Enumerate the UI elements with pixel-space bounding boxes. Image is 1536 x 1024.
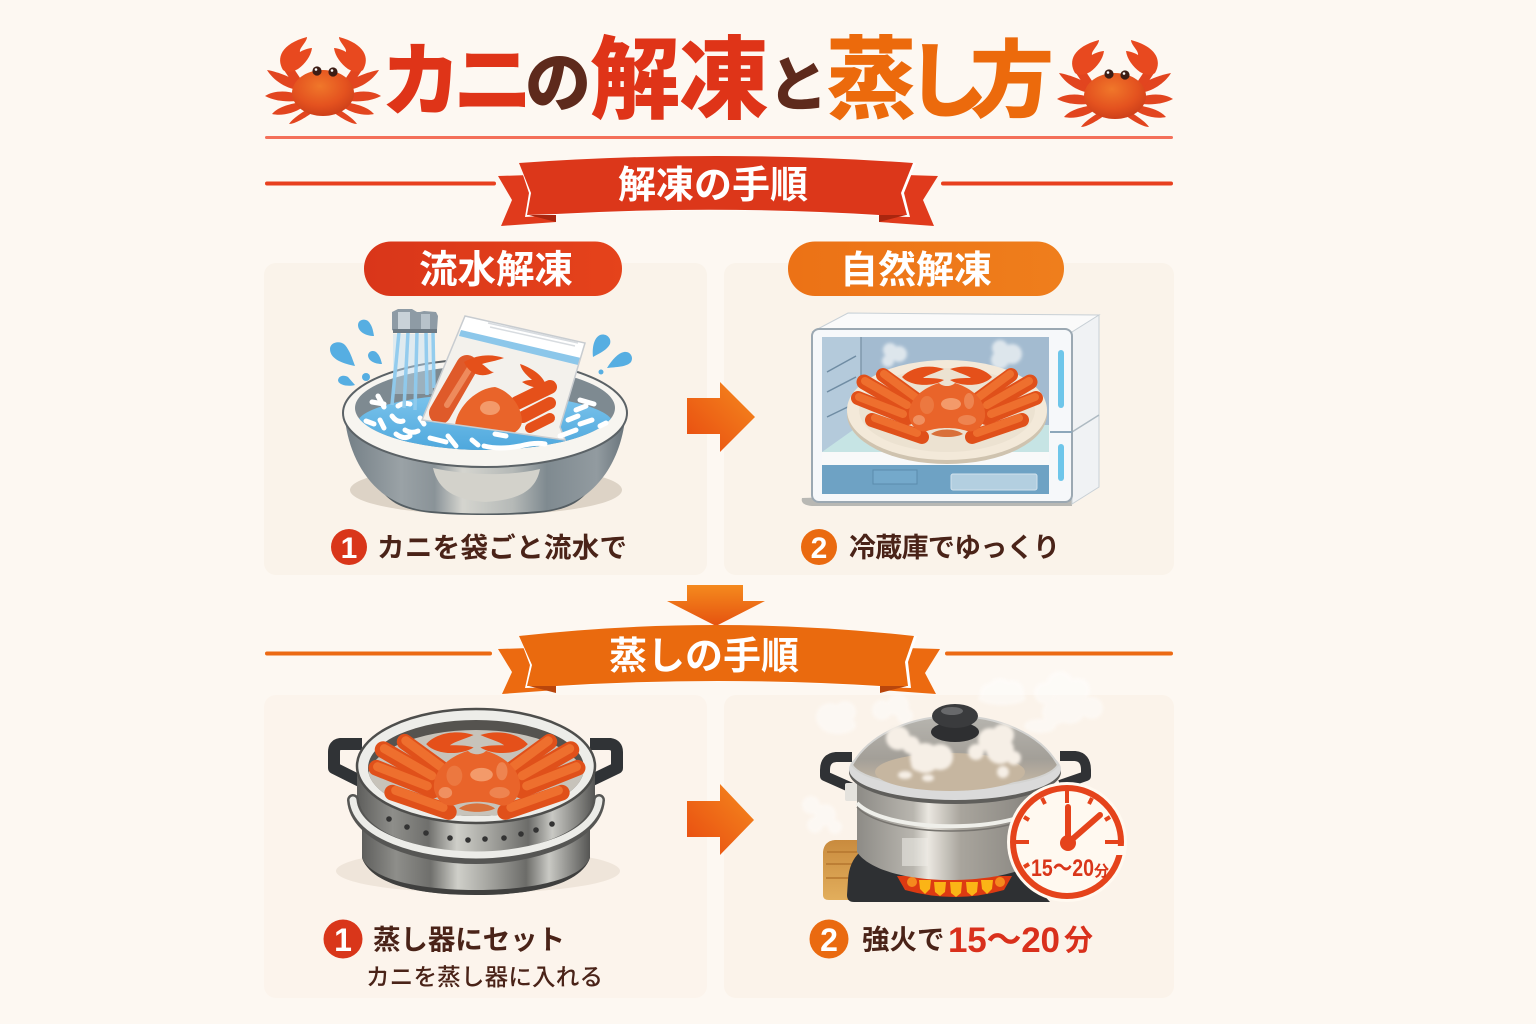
illustration: crab bag in bowl under tap	[330, 309, 632, 515]
step label: steam 2: 15〜20	[948, 921, 1060, 960]
step label: steam 2	[810, 920, 1093, 960]
icon: crab left	[265, 37, 381, 124]
title: 方	[970, 34, 1054, 128]
section banner: steaming: 蒸しの手順	[609, 636, 799, 678]
step label: thaw 2: 2	[811, 532, 827, 565]
icon: glass lid	[849, 704, 1061, 804]
icon: stove	[847, 852, 1050, 902]
section banner: thawing: 解凍の手順	[618, 165, 808, 207]
subheading pill: natural thaw	[788, 242, 1064, 296]
icon: crab right	[1057, 40, 1173, 127]
section banner: steaming	[265, 625, 1173, 694]
step label: thaw 1: カニを袋ごと流水で	[377, 532, 627, 563]
step label: steam 1	[324, 920, 603, 990]
title	[381, 31, 1054, 131]
arrow: steam step one to two	[687, 784, 754, 855]
title: ニ	[453, 37, 533, 126]
icon: steamer handles	[334, 744, 617, 781]
title: と	[768, 52, 828, 119]
subheading pill: flowing water: 流水解凍	[419, 249, 573, 292]
step label: thaw 2: 冷蔵庫でゆっくり	[849, 533, 1060, 563]
icon: steam clouds	[802, 671, 1103, 834]
icon: clock 15-20 minutes: 15〜20	[1031, 855, 1094, 882]
title rule	[265, 136, 1173, 139]
panel: flowing water thaw	[264, 263, 707, 575]
icon: clock 15-20 minutes	[1007, 782, 1127, 902]
title: 蒸	[826, 31, 916, 131]
step label: thaw 2	[801, 529, 1060, 565]
icon: flame	[897, 876, 1012, 897]
icon: crab in plastic bag	[422, 316, 585, 440]
step label: thaw 1: 1	[341, 532, 357, 565]
panel: set steamer	[264, 695, 707, 998]
title: 解	[590, 31, 680, 131]
icon: pot handles	[825, 756, 1086, 788]
illustration: pot on stove with steam	[802, 671, 1127, 902]
step label: steam 2: 強火で	[862, 924, 944, 955]
step label: steam 1: 1	[334, 922, 352, 958]
icon: clock 15-20 minutes: 分	[1094, 863, 1109, 880]
title: カ	[381, 37, 461, 126]
title: の	[525, 46, 591, 120]
arrow: thaw step one to two	[687, 382, 755, 452]
step label: steam 2: 分	[1064, 924, 1093, 957]
title: し	[906, 37, 988, 128]
panel: refrigerator thaw	[724, 263, 1174, 575]
title: 凍	[679, 31, 769, 131]
panel: high heat steam	[724, 695, 1174, 998]
section banner: thawing	[265, 156, 1173, 226]
icon: water droplets	[330, 320, 632, 386]
icon: wooden trivet	[823, 840, 860, 900]
subheading pill: natural thaw: 自然解凍	[840, 250, 992, 292]
arrow: down to steaming	[667, 585, 765, 626]
infographic canvas	[265, 34, 1173, 988]
icon: tap and water	[392, 309, 438, 410]
subheading pill: flowing water	[364, 242, 622, 296]
illustration: crab in steamer	[334, 709, 620, 895]
illustration: crab plate in refrigerator	[802, 313, 1099, 506]
step label: steam 1: 蒸し器にセット	[373, 924, 565, 955]
step label: steam 1: カニを蒸し器に入れる	[366, 964, 603, 990]
step label: steam 2: 2	[820, 922, 838, 958]
